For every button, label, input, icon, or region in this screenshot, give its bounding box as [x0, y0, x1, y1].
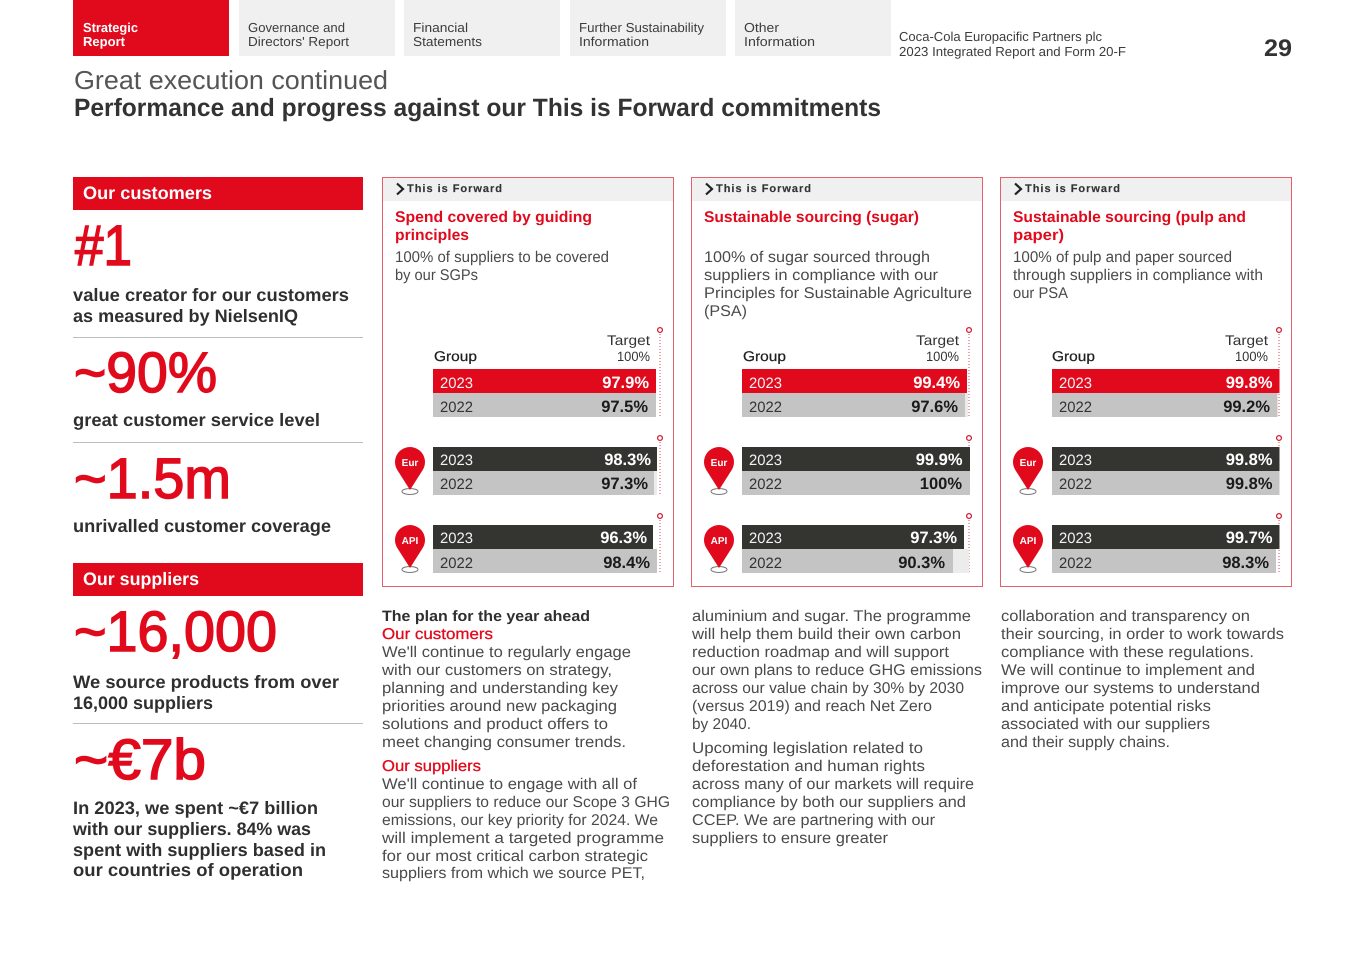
stat: ~16,000: ~16,000 — [74, 600, 277, 664]
report name: 2023 Integrated Report and Form 20-F — [899, 44, 1126, 59]
chart: Group: 2023 — [1059, 375, 1092, 392]
chart: Group — [433, 328, 662, 417]
chart: API: API — [1020, 536, 1037, 547]
stat: #1: value creator for our customers — [73, 285, 349, 305]
text column 2: reduction roadmap and will support — [692, 644, 950, 661]
chart: Europe — [395, 436, 662, 495]
description: 100% of pulp and paper sourced — [1013, 249, 1232, 266]
text column 1: the plan for the year ahead: Our customers — [382, 626, 493, 643]
chart: Group: 2023 — [440, 375, 473, 392]
heading: Sustainable sourcing (pulp and — [1013, 209, 1246, 226]
tab: Other Information: Information — [744, 34, 815, 49]
text column 2: deforestation and human rights — [692, 758, 925, 775]
panel: left column stats — [72, 177, 363, 880]
text column 1: the plan for the year ahead — [381, 608, 670, 882]
chart: API: 90.3% — [898, 554, 945, 572]
text column 1: the plan for the year ahead: suppliers from which we source PET, — [382, 865, 645, 882]
text column 3: We will continue to implement and — [1001, 662, 1255, 679]
stat: ~€7b: ~€7b — [74, 728, 206, 792]
text column 3: improve our systems to understand — [1001, 680, 1260, 697]
chart: Europe — [1013, 436, 1281, 495]
tab: Governance and Directors' Report: Governance and — [248, 20, 345, 35]
title: Great execution continued — [74, 65, 388, 95]
stat: ~1.5m — [73, 447, 331, 536]
chart: Group: 2022 — [749, 399, 782, 416]
chart: Europe: Eur — [1020, 458, 1036, 469]
chart: Group: 97.5% — [601, 398, 648, 416]
text column 2: aluminium and sugar. The programme — [692, 608, 971, 625]
text column 2: compliance by both our suppliers and — [692, 794, 966, 811]
panel: sustainable sourcing (sugar) — [692, 178, 982, 586]
chart: Group: Group — [743, 348, 786, 364]
tab: Further Sustainability Information: Further Sustainability — [579, 20, 704, 35]
chart: Group: 2022 — [440, 399, 473, 416]
heading: principles — [395, 227, 469, 244]
chart: Europe: 99.8% — [1226, 475, 1273, 493]
chart: API: 2023 — [749, 530, 782, 547]
chart: API: API — [402, 536, 419, 547]
text column 1: the plan for the year ahead: priorities around new packaging — [382, 698, 617, 715]
text column 2: will help them build their own carbon — [691, 626, 961, 643]
chart: API — [704, 514, 971, 573]
heading: paper) — [1013, 227, 1064, 244]
badge: This is Forward — [692, 178, 982, 201]
chart: Group: 99.2% — [1223, 398, 1270, 416]
stat: ~€7b — [72, 728, 326, 880]
stat: ~90%: ~90% — [74, 341, 217, 405]
chart: API: 97.3% — [910, 529, 957, 547]
tab: Further Sustainability Information: Information — [579, 34, 649, 49]
chart: Europe: Eur — [711, 458, 727, 469]
chart: API: 96.3% — [600, 529, 647, 547]
stat: ~16,000: 16,000 suppliers — [73, 693, 213, 713]
chart: API — [395, 514, 662, 573]
chart: Group: 100% — [617, 349, 650, 364]
panel: spend covered by guiding principles — [382, 178, 674, 586]
stat: #1: as measured by NielsenIQ — [73, 306, 298, 326]
description — [704, 249, 972, 320]
heading — [1013, 209, 1246, 244]
tab: Financial Statements: Financial — [413, 20, 468, 35]
text column 2: by 2040. — [692, 716, 751, 733]
chart: API: 98.4% — [603, 554, 650, 572]
chart: API — [1013, 514, 1281, 573]
tab: Governance and Directors' Report: Directors' Report — [248, 34, 349, 49]
chart: Europe: 2022 — [749, 476, 782, 493]
description — [1013, 249, 1263, 302]
chart: Europe: 2023 — [1059, 452, 1092, 469]
text column 3: and anticipate potential risks — [1001, 698, 1211, 715]
tab: Financial Statements: Statements — [413, 34, 483, 49]
text column 1: the plan for the year ahead: solutions and product offers to — [382, 716, 608, 733]
badge: This is Forward — [1001, 178, 1291, 201]
description: (PSA) — [704, 303, 747, 320]
chart: Europe — [704, 436, 971, 495]
stat: ~16,000: We source products from over — [73, 672, 339, 692]
text column 3 — [1001, 608, 1284, 751]
text column 1: the plan for the year ahead: The plan for the year ahead — [382, 608, 590, 625]
navigation tabs — [73, 0, 891, 56]
text column 1: the plan for the year ahead: for our most critical carbon strategic — [382, 848, 648, 865]
tab: Strategic Report: Report — [83, 34, 126, 49]
tab: Financial Statements — [404, 0, 560, 56]
chart: Group: 99.4% — [913, 374, 960, 392]
heading: Spend covered by guiding — [395, 209, 592, 226]
chart: Europe: 2023 — [749, 452, 782, 469]
stat: ~90% — [73, 341, 320, 430]
chart: API: 98.3% — [1222, 554, 1269, 572]
chart: API: API — [711, 536, 728, 547]
chart: API: 2023 — [440, 530, 473, 547]
text column 3: collaboration and transparency on — [1001, 608, 1250, 625]
chart: Europe: Eur — [402, 458, 418, 469]
description: 100% of sugar sourced through — [704, 249, 930, 266]
stat: ~€7b: with our suppliers. 84% was — [72, 819, 311, 839]
panel: sustainable sourcing (pulp and paper) — [1000, 178, 1292, 586]
stat: ~€7b: spent with suppliers based in — [73, 840, 326, 860]
page number: 29 — [1264, 35, 1292, 62]
chart: Europe: 2022 — [440, 476, 473, 493]
chart: API: 2022 — [1059, 555, 1092, 572]
description: suppliers in compliance with our — [704, 267, 938, 284]
chart: Europe: 97.3% — [601, 475, 648, 493]
heading: Sustainable sourcing (sugar) — [704, 209, 919, 226]
stat: ~90%: great customer service level — [73, 410, 320, 430]
chart: Group: Target — [1225, 332, 1268, 348]
heading: Our customers — [73, 177, 363, 210]
heading: Our suppliers: Our suppliers — [83, 569, 199, 589]
chart: Group: 100% — [1235, 349, 1268, 364]
text column 2: (versus 2019) and reach Net Zero — [692, 698, 932, 715]
tab: Further Sustainability Information — [570, 0, 726, 56]
description: our PSA — [1013, 285, 1069, 302]
stat: ~1.5m: unrivalled customer coverage — [73, 516, 331, 536]
text column 1: the plan for the year ahead: Our suppliers — [382, 758, 481, 775]
description: 100% of suppliers to be covered — [395, 249, 609, 266]
text column 2: our own plans to reduce GHG emissions — [692, 662, 982, 679]
text column 1: the plan for the year ahead: with our customers on strategy, — [381, 662, 612, 679]
text column 2: CCEP. We are partnering with our — [692, 812, 935, 829]
heading — [395, 209, 592, 244]
tab: Other Information: Other — [744, 20, 780, 35]
tab: Strategic Report — [73, 0, 229, 56]
stat: ~€7b: our countries of operation — [73, 860, 303, 880]
badge: This is Forward — [383, 178, 673, 201]
heading: Our customers: Our customers — [83, 183, 212, 203]
report name: Coca-Cola Europacific Partners plc — [899, 29, 1102, 44]
chart: API: 2023 — [1059, 530, 1092, 547]
chart: Group: 99.8% — [1226, 374, 1273, 392]
text column 1: the plan for the year ahead: emissions, our key priority for 2024. We — [382, 812, 658, 829]
tab: Strategic Report: Strategic — [83, 20, 138, 35]
text column 1: the plan for the year ahead: planning and understanding key — [382, 680, 618, 697]
text column 3: associated with our suppliers — [1001, 716, 1210, 733]
stat: #1: #1 — [75, 214, 132, 278]
badge: This is Forward: This is Forward — [407, 183, 502, 195]
chart: Europe: 2022 — [1059, 476, 1092, 493]
chart: Group — [742, 328, 971, 417]
chart: API: 2022 — [749, 555, 782, 572]
tab: Other Information — [735, 0, 891, 56]
text column 1: the plan for the year ahead: will implement a targeted programme — [381, 830, 664, 847]
chart: Europe: 2023 — [440, 452, 473, 469]
chart: Europe: 99.9% — [916, 451, 963, 469]
text column 1: the plan for the year ahead: meet changing consumer trends. — [382, 734, 626, 751]
chart: Group: Group — [434, 348, 477, 364]
chart: Group: Target — [607, 332, 650, 348]
text column 3: their sourcing, in order to work towards — [1001, 626, 1284, 643]
description: Principles for Sustainable Agriculture — [704, 285, 972, 302]
text column 2: suppliers to ensure greater — [692, 830, 888, 847]
chart: API: 99.7% — [1226, 529, 1273, 547]
description: by our SGPs — [395, 267, 478, 284]
chart: Europe: 99.8% — [1226, 451, 1273, 469]
report name — [899, 29, 1126, 59]
stat: ~1.5m: ~1.5m — [74, 447, 231, 511]
description: through suppliers in compliance with — [1013, 267, 1263, 284]
text column 1: the plan for the year ahead: We'll continue to regularly engage — [382, 644, 631, 661]
badge: This is Forward: This is Forward — [1025, 183, 1120, 195]
text column 1: the plan for the year ahead: our suppliers to reduce our Scope 3 GHG — [382, 794, 670, 811]
chart: Europe: 98.3% — [604, 451, 651, 469]
text column 2 — [691, 608, 982, 847]
text column 2: Upcoming legislation related to — [692, 740, 923, 757]
chart: Group: 97.9% — [602, 374, 649, 392]
chart: Group: 2022 — [1059, 399, 1092, 416]
stat: ~16,000 — [73, 600, 339, 713]
title: Performance and progress against our This is Forward commitments — [74, 94, 881, 122]
tab: Governance and Directors' Report — [239, 0, 395, 56]
chart: API: 2022 — [440, 555, 473, 572]
chart: Group — [1052, 328, 1281, 417]
heading: Our suppliers — [73, 563, 363, 596]
chart: Europe: 100% — [920, 475, 962, 493]
text column 1: the plan for the year ahead: We'll continue to engage with all of — [382, 776, 638, 793]
text column 3: compliance with these regulations. — [1001, 644, 1254, 661]
chart: Group: 100% — [926, 349, 959, 364]
stat: #1 — [73, 214, 349, 326]
title — [74, 65, 881, 122]
chart: Group: 2023 — [749, 375, 782, 392]
text column 2: across many of our markets will require — [692, 776, 974, 793]
stat: ~€7b: In 2023, we spent ~€7 billion — [73, 798, 318, 818]
chart: Group: Group — [1052, 348, 1095, 364]
text column 3: and their supply chains. — [1001, 734, 1170, 751]
badge: This is Forward: This is Forward — [716, 183, 811, 195]
text column 2: across our value chain by 30% by 2030 — [692, 680, 964, 697]
chart: Group: Target — [916, 332, 959, 348]
chart: Group: 97.6% — [911, 398, 958, 416]
description — [395, 249, 609, 284]
